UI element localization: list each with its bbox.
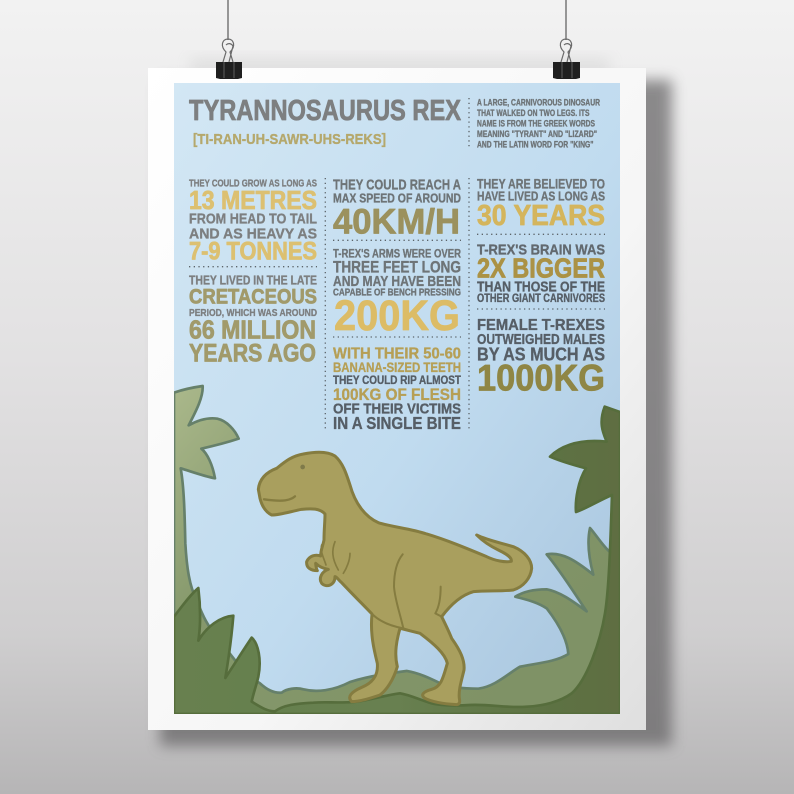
fact: top speed: 40KM/H bbox=[333, 202, 460, 241]
fact: length and weight: THEY COULD GROW AS LONG AS bbox=[189, 179, 317, 190]
description text block: A LARGE, CARNIVOROUS DINOSAUR bbox=[477, 98, 600, 108]
poster paper bbox=[148, 68, 646, 730]
back foliage: pale palm tree and ferns bbox=[174, 386, 620, 714]
fact: brain size: OTHER GIANT CARNIVORES bbox=[477, 292, 605, 305]
fact: brain size bbox=[477, 241, 605, 305]
fact: cretaceous period: THEY LIVED IN THE LATE bbox=[189, 274, 317, 288]
fact: female weight bbox=[477, 317, 605, 399]
description text block: THAT WALKED ON TWO LEGS. ITS bbox=[477, 108, 590, 118]
column 1: size and period facts bbox=[189, 179, 317, 367]
front foliage: dark palm, ground and bushes bbox=[174, 407, 620, 714]
fact: arm strength bbox=[333, 247, 461, 340]
fact: teeth and bite: THEY COULD RIP ALMOST bbox=[333, 374, 461, 387]
fact: teeth and bite: WITH THEIR 50-60 bbox=[333, 346, 461, 363]
column 2: speed, arms and teeth facts bbox=[333, 176, 461, 433]
fact: female weight: 1000KG bbox=[477, 357, 605, 399]
fact: female weight: FEMALE T-REXES bbox=[477, 317, 605, 334]
fact: cretaceous period: CRETACEOUS bbox=[189, 285, 317, 308]
sky background bbox=[174, 83, 620, 714]
fact: length and weight: 13 METRES bbox=[189, 185, 317, 215]
illustration: jungle and dinosaur bbox=[174, 386, 620, 714]
icon: left binder clip and string bbox=[216, 0, 242, 79]
fact: brain size: 2X BIGGER bbox=[477, 252, 605, 283]
dotted dividers bbox=[189, 98, 605, 430]
fact: cretaceous period: YEARS AGO bbox=[189, 339, 316, 367]
fact: lifespan: 30 YEARS bbox=[477, 200, 605, 232]
fact: length and weight: FROM HEAD TO TAIL bbox=[189, 211, 317, 228]
fact: brain size: T-REX'S BRAIN WAS bbox=[477, 241, 605, 258]
fact: female weight: BY AS MUCH AS bbox=[477, 343, 605, 364]
dinosaur belly and leg lines bbox=[372, 554, 442, 633]
icon: right binder clip and string bbox=[553, 0, 580, 79]
dinosaur bbox=[258, 452, 532, 705]
fact: lifespan bbox=[477, 176, 605, 232]
dinosaur body bbox=[258, 452, 532, 705]
poster shadow bbox=[160, 58, 672, 746]
fact: arm strength: AND MAY HAVE BEEN bbox=[333, 273, 461, 290]
panel: poster artwork bbox=[174, 83, 620, 714]
fact: teeth and bite: 100KG OF FLESH bbox=[333, 385, 461, 404]
fact: arm strength: CAPABLE OF BENCH PRESSING bbox=[333, 288, 461, 299]
dinosaur arms bbox=[321, 542, 350, 573]
fact: arm strength: THREE FEET LONG bbox=[333, 258, 461, 276]
fact: cretaceous period: PERIOD, WHICH WAS AROUND bbox=[189, 308, 317, 319]
fact: brain size: THAN THOSE OF THE bbox=[477, 280, 605, 296]
description text block: AND THE LATIN WORD FOR "KING" bbox=[477, 139, 594, 149]
fact: length and weight: AND AS HEAVY AS bbox=[189, 225, 317, 242]
fact: top speed bbox=[333, 176, 461, 241]
fact: top speed: THEY COULD REACH A bbox=[333, 176, 461, 193]
dinosaur mouth bbox=[264, 496, 295, 501]
fact: cretaceous period: 66 MILLION bbox=[189, 315, 316, 345]
description text block: NAME IS FROM THE GREEK WORDS bbox=[477, 119, 595, 129]
description text block bbox=[477, 98, 600, 149]
column 3: lifespan, brain and weight facts bbox=[477, 176, 605, 399]
fact: arm strength: 200KG bbox=[334, 293, 460, 340]
fact: teeth and bite: IN A SINGLE BITE bbox=[333, 413, 461, 433]
fact: teeth and bite: BANANA-SIZED TEETH bbox=[333, 360, 461, 375]
fact: cretaceous period bbox=[189, 274, 317, 367]
fact: lifespan: THEY ARE BELIEVED TO bbox=[477, 176, 605, 191]
description text block: MEANING "TYRANT" AND "LIZARD" bbox=[477, 129, 597, 139]
title: TYRANNOSAURUS REX bbox=[189, 95, 462, 127]
fact: teeth and bite bbox=[333, 346, 461, 433]
fact: female weight: OUTWEIGHED MALES bbox=[477, 332, 605, 348]
fact: arm strength: T-REX'S ARMS WERE OVER bbox=[333, 247, 461, 261]
dinosaur eye bbox=[300, 465, 305, 469]
fact: top speed: MAX SPEED OF AROUND bbox=[333, 190, 461, 205]
fact: length and weight bbox=[189, 179, 317, 266]
pronunciation: [TI-RAN-UH-SAWR-UHS-REKS] bbox=[193, 131, 386, 148]
fact: teeth and bite: OFF THEIR VICTIMS bbox=[333, 401, 461, 418]
fact: lifespan: HAVE LIVED AS LONG AS bbox=[477, 189, 605, 204]
fact: length and weight: 7-9 TONNES bbox=[189, 238, 317, 266]
